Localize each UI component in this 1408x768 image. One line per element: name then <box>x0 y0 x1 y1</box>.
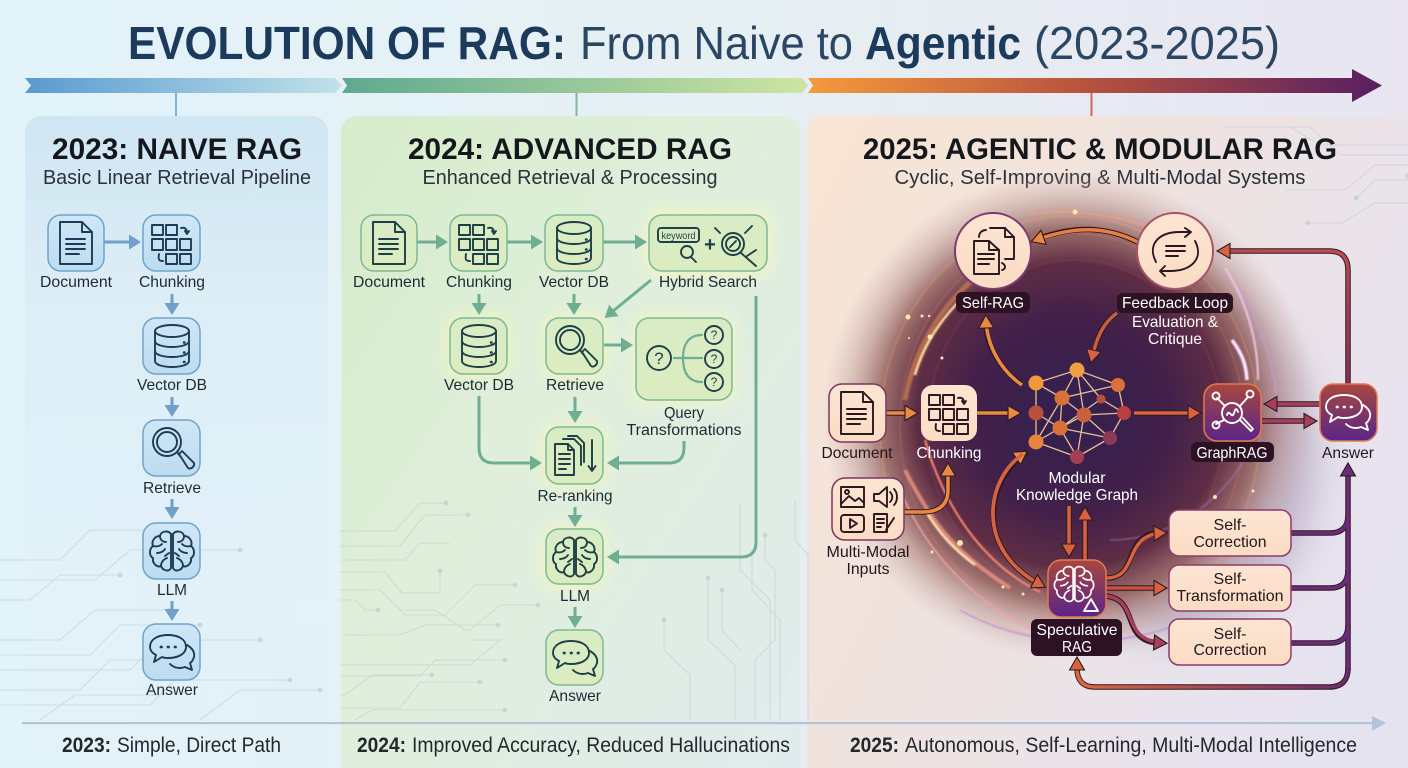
node: self-correction: Correction <box>1194 642 1266 659</box>
title: EVOLUTION OF RAG: <box>128 17 566 69</box>
node: LLM: LLM <box>560 588 590 605</box>
node: modular knowledge graph label <box>1016 470 1138 504</box>
node glows: 2024 <box>447 211 771 588</box>
summary: 2024: Improved Accuracy, Reduced Hallucinations <box>412 734 790 757</box>
title <box>128 17 1280 69</box>
node: chunking: Chunking <box>446 274 512 291</box>
heading: 2025: 2025: AGENTIC & MODULAR RAG <box>863 133 1337 166</box>
node: query transformations: Query <box>664 405 704 422</box>
node: hybrid search <box>649 215 767 291</box>
node: retrieve: Retrieve <box>546 377 604 394</box>
title: Agentic <box>865 17 1021 69</box>
node: document <box>40 215 113 291</box>
heading: 2024 <box>408 133 732 189</box>
node: answer <box>546 630 603 705</box>
node: query transformations <box>626 318 742 439</box>
node: self-correction: Self- <box>1214 517 1246 534</box>
glowing orb backdrop <box>822 170 1318 660</box>
node: retrieve <box>546 318 604 394</box>
summary: 2025: 2025: <box>850 734 899 757</box>
arrows: 2024 pipeline <box>417 242 756 625</box>
node: document: Document <box>40 274 113 291</box>
heading: 2025 <box>863 133 1337 189</box>
node: vector DB <box>444 318 514 394</box>
arrows: 2025 flows <box>886 229 1348 687</box>
node: self-transformation <box>1169 565 1291 611</box>
bottom timeline arrow <box>22 716 1386 731</box>
node: self-transformation: Self- <box>1214 571 1246 588</box>
node: answer: Answer <box>549 688 602 705</box>
node: chunking <box>916 385 982 462</box>
node: self-transformation: Transformation <box>1176 588 1284 605</box>
node: query transformations: ? <box>711 328 718 342</box>
title: From Naive to <box>580 17 853 69</box>
summary: 2024: 2024: <box>357 734 406 757</box>
node: answer: Answer <box>146 682 199 699</box>
summary: 2023: 2023: <box>62 734 111 757</box>
heading: 2024: 2024: ADVANCED RAG <box>408 133 732 166</box>
panel: 2024 advanced RAG background <box>341 116 800 768</box>
node: self-RAG <box>955 213 1031 313</box>
node: speculative RAG: RAG <box>1062 639 1092 656</box>
node: hybrid search: keyword <box>662 231 696 242</box>
node: vector DB: Vector DB <box>444 377 514 394</box>
node: answer <box>1320 384 1377 462</box>
panel: 2023 naive RAG background <box>25 116 328 768</box>
node: multi-modal inputs <box>826 478 910 578</box>
arrows: 2023 pipeline <box>104 242 172 618</box>
node: self-correction: Correction <box>1194 534 1266 551</box>
heading: 2023: 2023: NAIVE RAG <box>52 133 302 166</box>
node: query transformations: Transformations <box>626 422 742 439</box>
node: query transformations: ? <box>654 349 664 368</box>
heading: 2025: Cyclic, Self-Improving & Multi-Modal Systems <box>894 167 1306 189</box>
node: answer: Answer <box>1322 445 1375 462</box>
node: retrieve: Retrieve <box>143 480 201 497</box>
node: vector DB <box>539 215 609 291</box>
node: document <box>822 384 893 462</box>
summary: 2023 <box>62 734 281 757</box>
panel: 2025 agentic RAG background <box>807 116 1408 768</box>
node: self-correction: Self- <box>1214 626 1246 643</box>
node: LLM: LLM <box>157 582 187 599</box>
heading: 2024: Enhanced Retrieval & Processing <box>422 167 718 189</box>
node: multi-modal inputs: Multi-Modal <box>826 544 910 561</box>
node: retrieve <box>143 420 201 497</box>
node: speculative RAG: Speculative <box>1036 622 1118 639</box>
node: LLM <box>143 523 200 599</box>
node: self-correction <box>1169 510 1291 556</box>
node: hybrid search: + <box>704 234 716 256</box>
node: LLM <box>546 529 603 605</box>
node: vector DB: Vector DB <box>539 274 609 291</box>
heading: 2023: Basic Linear Retrieval Pipeline <box>43 167 311 189</box>
summary: 2023: Simple, Direct Path <box>117 734 281 757</box>
node: modular knowledge graph label: Knowledge Graph <box>1016 487 1138 504</box>
node: multi-modal inputs: Inputs <box>846 561 890 578</box>
node: chunking <box>446 215 512 291</box>
node: query transformations: ? <box>711 352 718 366</box>
node: document: Document <box>353 274 426 291</box>
node: feedback loop: Critique <box>1148 331 1202 348</box>
node: vector DB <box>137 318 207 394</box>
node: document: Document <box>822 445 893 462</box>
heading: 2023 <box>43 133 311 189</box>
timeline arrow <box>25 69 1382 116</box>
node: answer <box>143 624 200 699</box>
node: speculative RAG <box>1031 560 1122 656</box>
node: feedback loop: Evaluation & <box>1132 314 1218 331</box>
node: GraphRAG: GraphRAG <box>1196 445 1268 462</box>
node: self-RAG: Self-RAG <box>962 295 1024 312</box>
node: modular knowledge graph label: Modular <box>1048 470 1106 487</box>
node: hybrid search: Hybrid Search <box>659 274 757 291</box>
node: self-correction <box>1169 619 1291 665</box>
node: feedback loop <box>1117 213 1233 348</box>
node: feedback loop: Feedback Loop <box>1122 295 1228 312</box>
summary: 2025: Autonomous, Self-Learning, Multi-Modal Intelligence <box>905 734 1357 757</box>
node: re-ranking <box>538 427 612 505</box>
node: re-ranking: Re-ranking <box>538 488 612 505</box>
node: chunking: Chunking <box>916 445 982 462</box>
title: (2023-2025) <box>1034 17 1280 69</box>
knowledge graph network <box>1028 362 1131 464</box>
node: chunking: Chunking <box>139 274 205 291</box>
node: query transformations: ? <box>711 375 718 389</box>
node: vector DB: Vector DB <box>137 377 207 394</box>
node: document <box>353 215 426 291</box>
node: GraphRAG <box>1191 384 1274 462</box>
node: chunking <box>139 215 205 291</box>
